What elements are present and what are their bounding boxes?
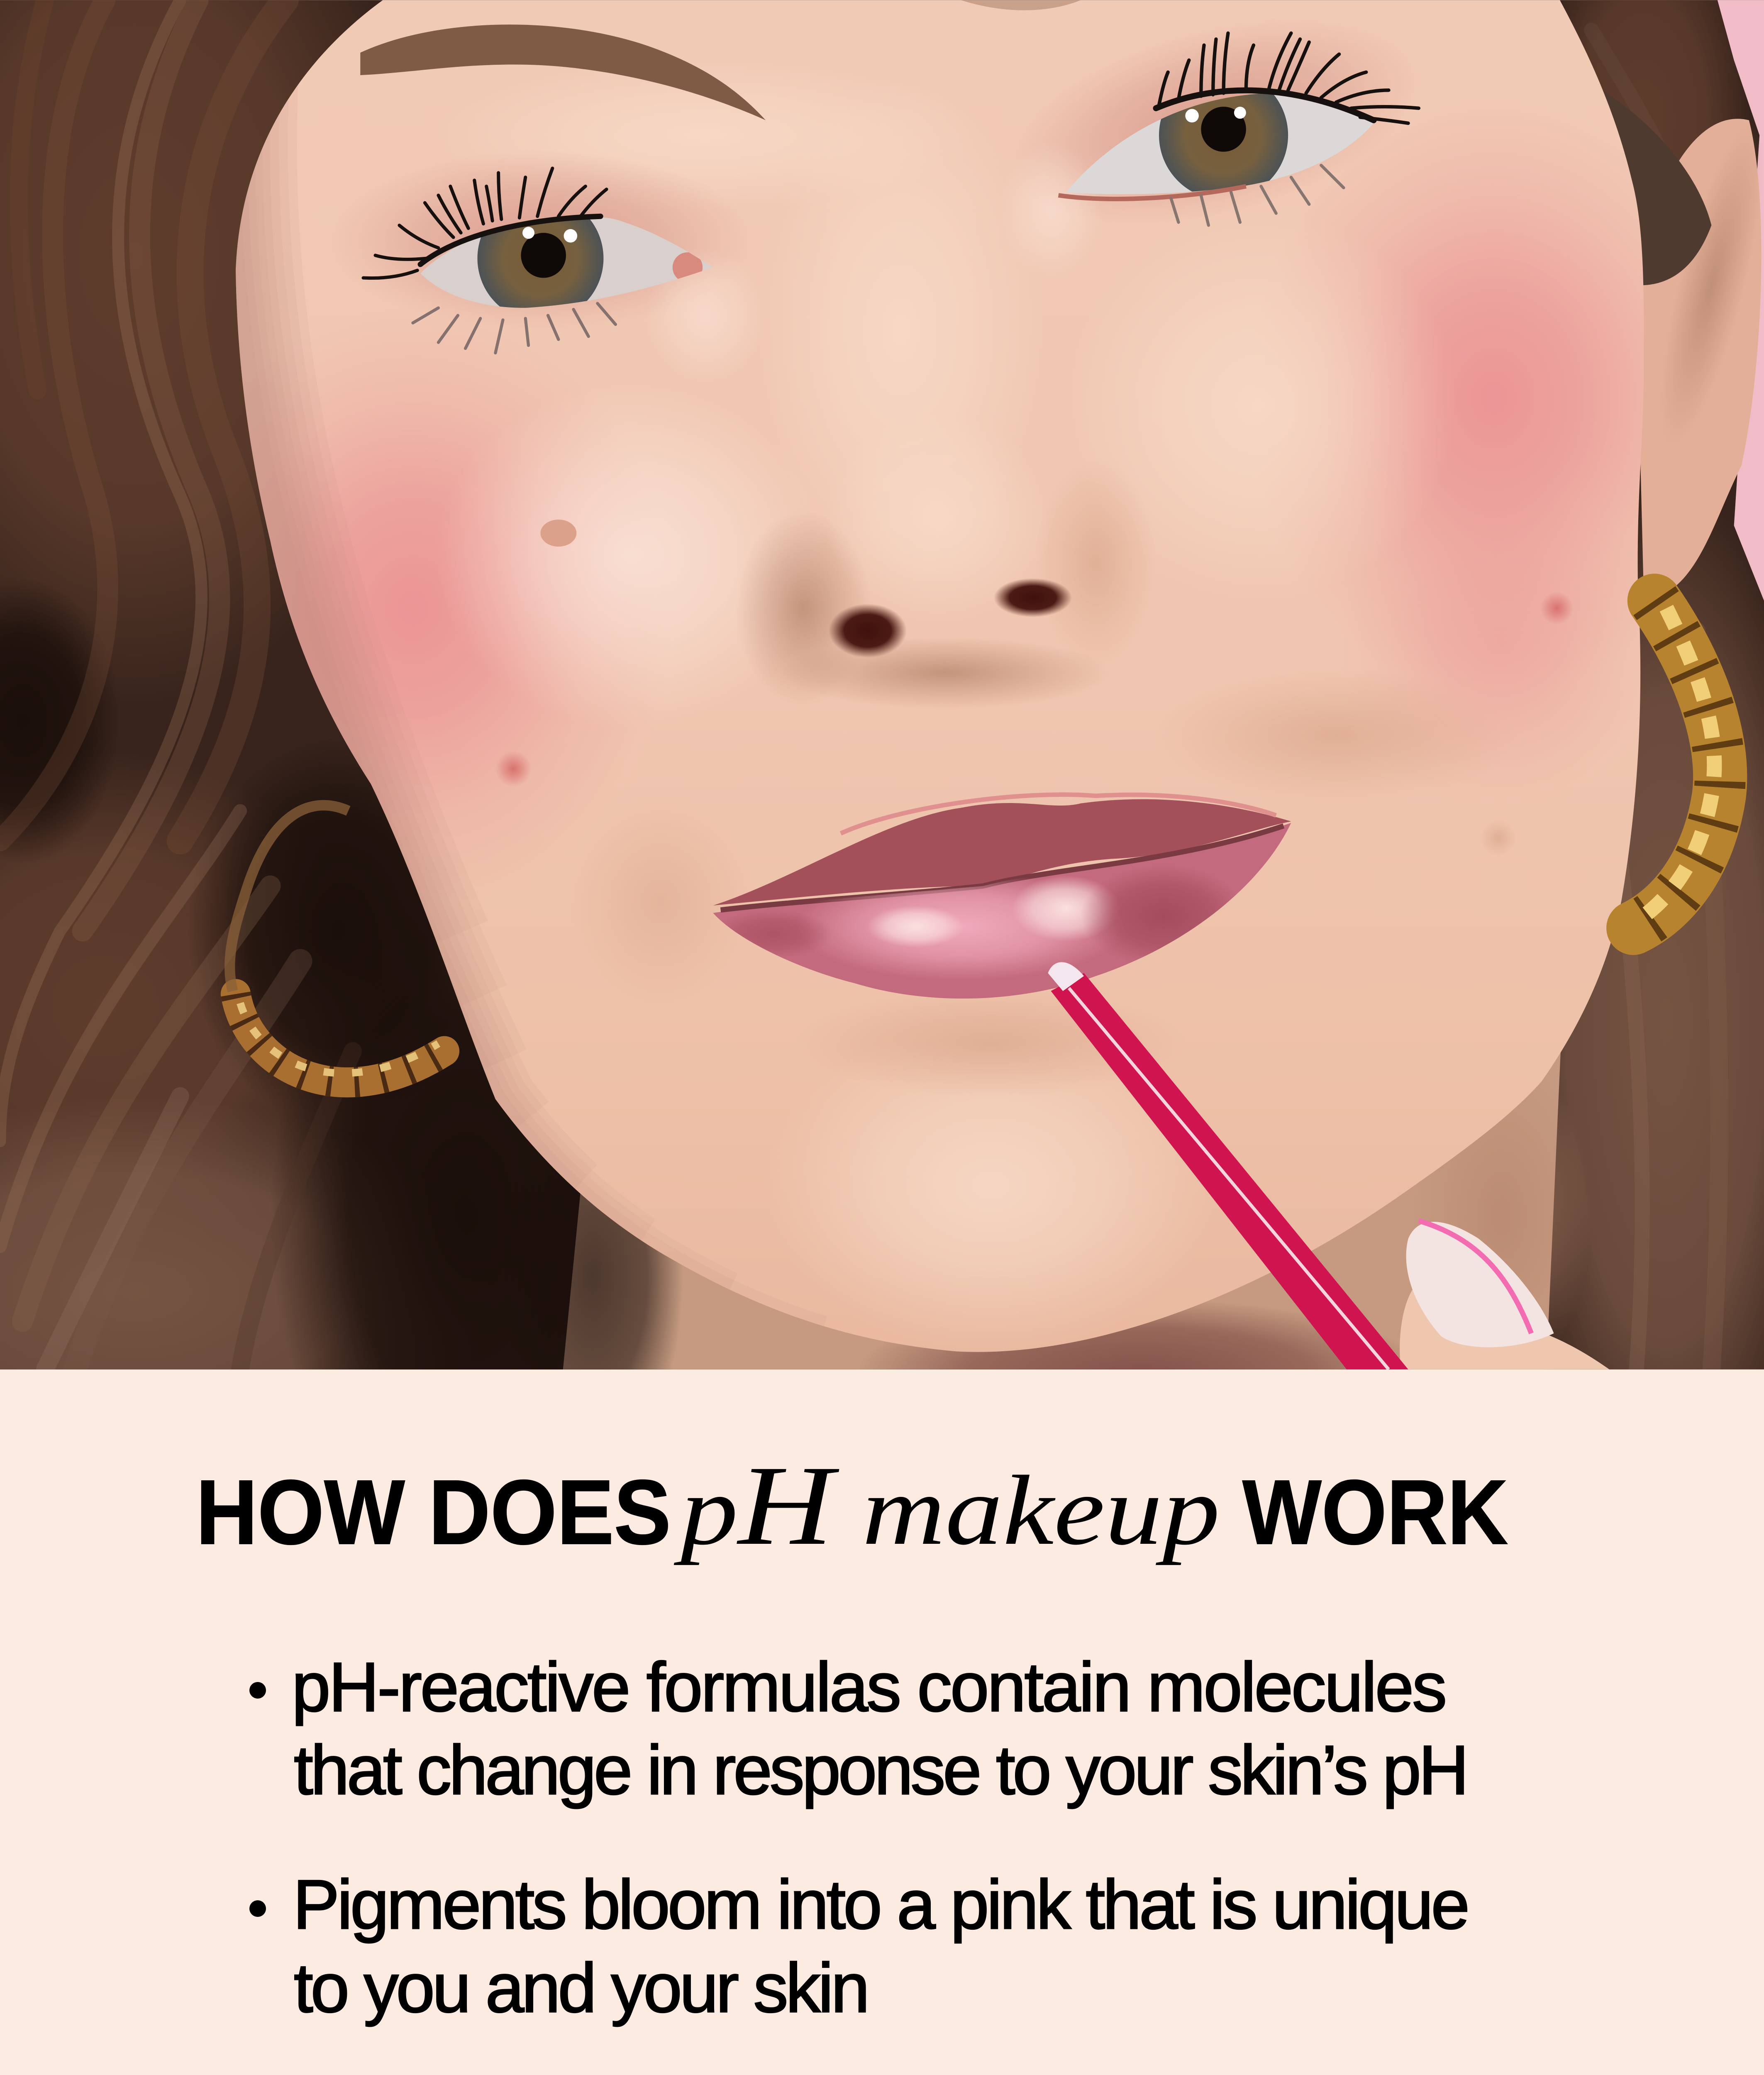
skin marks — [495, 520, 1574, 856]
bullet 1: that change in response to your skin’s pH — [294, 1731, 1469, 1809]
heading: pH makeup — [673, 1443, 1220, 1569]
right eye upper lashes — [1156, 33, 1419, 123]
chin highlight — [766, 1021, 1216, 1351]
left eye lower lashes — [413, 303, 615, 353]
bullet 1: pH-reactive formulas contain molecules — [292, 1648, 1447, 1726]
heading: WORK — [1242, 1461, 1508, 1563]
left eye upper lashes — [364, 168, 607, 278]
nose shading — [736, 413, 1156, 709]
ear — [1576, 75, 1764, 601]
heading: HOW DOES — [196, 1461, 671, 1563]
blush: left cheek — [150, 308, 676, 908]
brow — [360, 24, 766, 120]
nostrils — [829, 578, 1072, 658]
bullet 2: Pigments bloom into a pink that is unique — [293, 1865, 1470, 1943]
upper face highlight — [435, 60, 976, 210]
finger — [1400, 1276, 1609, 1370]
right eye socket — [990, 0, 1442, 261]
left face edge shadow — [229, 0, 956, 1351]
photo: close-up of face with lip liner — [0, 0, 1764, 1370]
lip liner pencil — [1048, 962, 1408, 1370]
bullet 2: to you and your skin — [294, 1949, 870, 2027]
left eye socket — [330, 150, 751, 330]
neck — [503, 1036, 1591, 1472]
face skin — [236, 0, 1644, 1352]
blush: lower right cheek — [1336, 481, 1666, 811]
right gold earring — [1633, 601, 1720, 928]
right cheek highlight — [1066, 210, 1456, 601]
text panel: beige background with heading and bullets — [0, 1370, 1764, 2075]
bullet 1 — [249, 1648, 1469, 1809]
lips — [713, 795, 1291, 998]
right eye lower lashes — [1171, 165, 1344, 225]
left eye — [364, 168, 728, 353]
heading — [196, 1443, 1508, 1569]
right eye — [1051, 33, 1419, 225]
nose bridge highlight — [758, 75, 1043, 586]
hair background — [0, 0, 1764, 1562]
under-eye highlights — [646, 248, 766, 383]
bullet 2 — [249, 1865, 1470, 2027]
blush: right cheek — [1246, 98, 1742, 698]
mouth corner shadows — [1156, 668, 1516, 803]
left gold hoop earring — [230, 805, 444, 1082]
cheek highlight — [435, 383, 826, 728]
pink backdrop corner — [1718, 0, 1764, 601]
nail with pink line — [1406, 1221, 1554, 1347]
